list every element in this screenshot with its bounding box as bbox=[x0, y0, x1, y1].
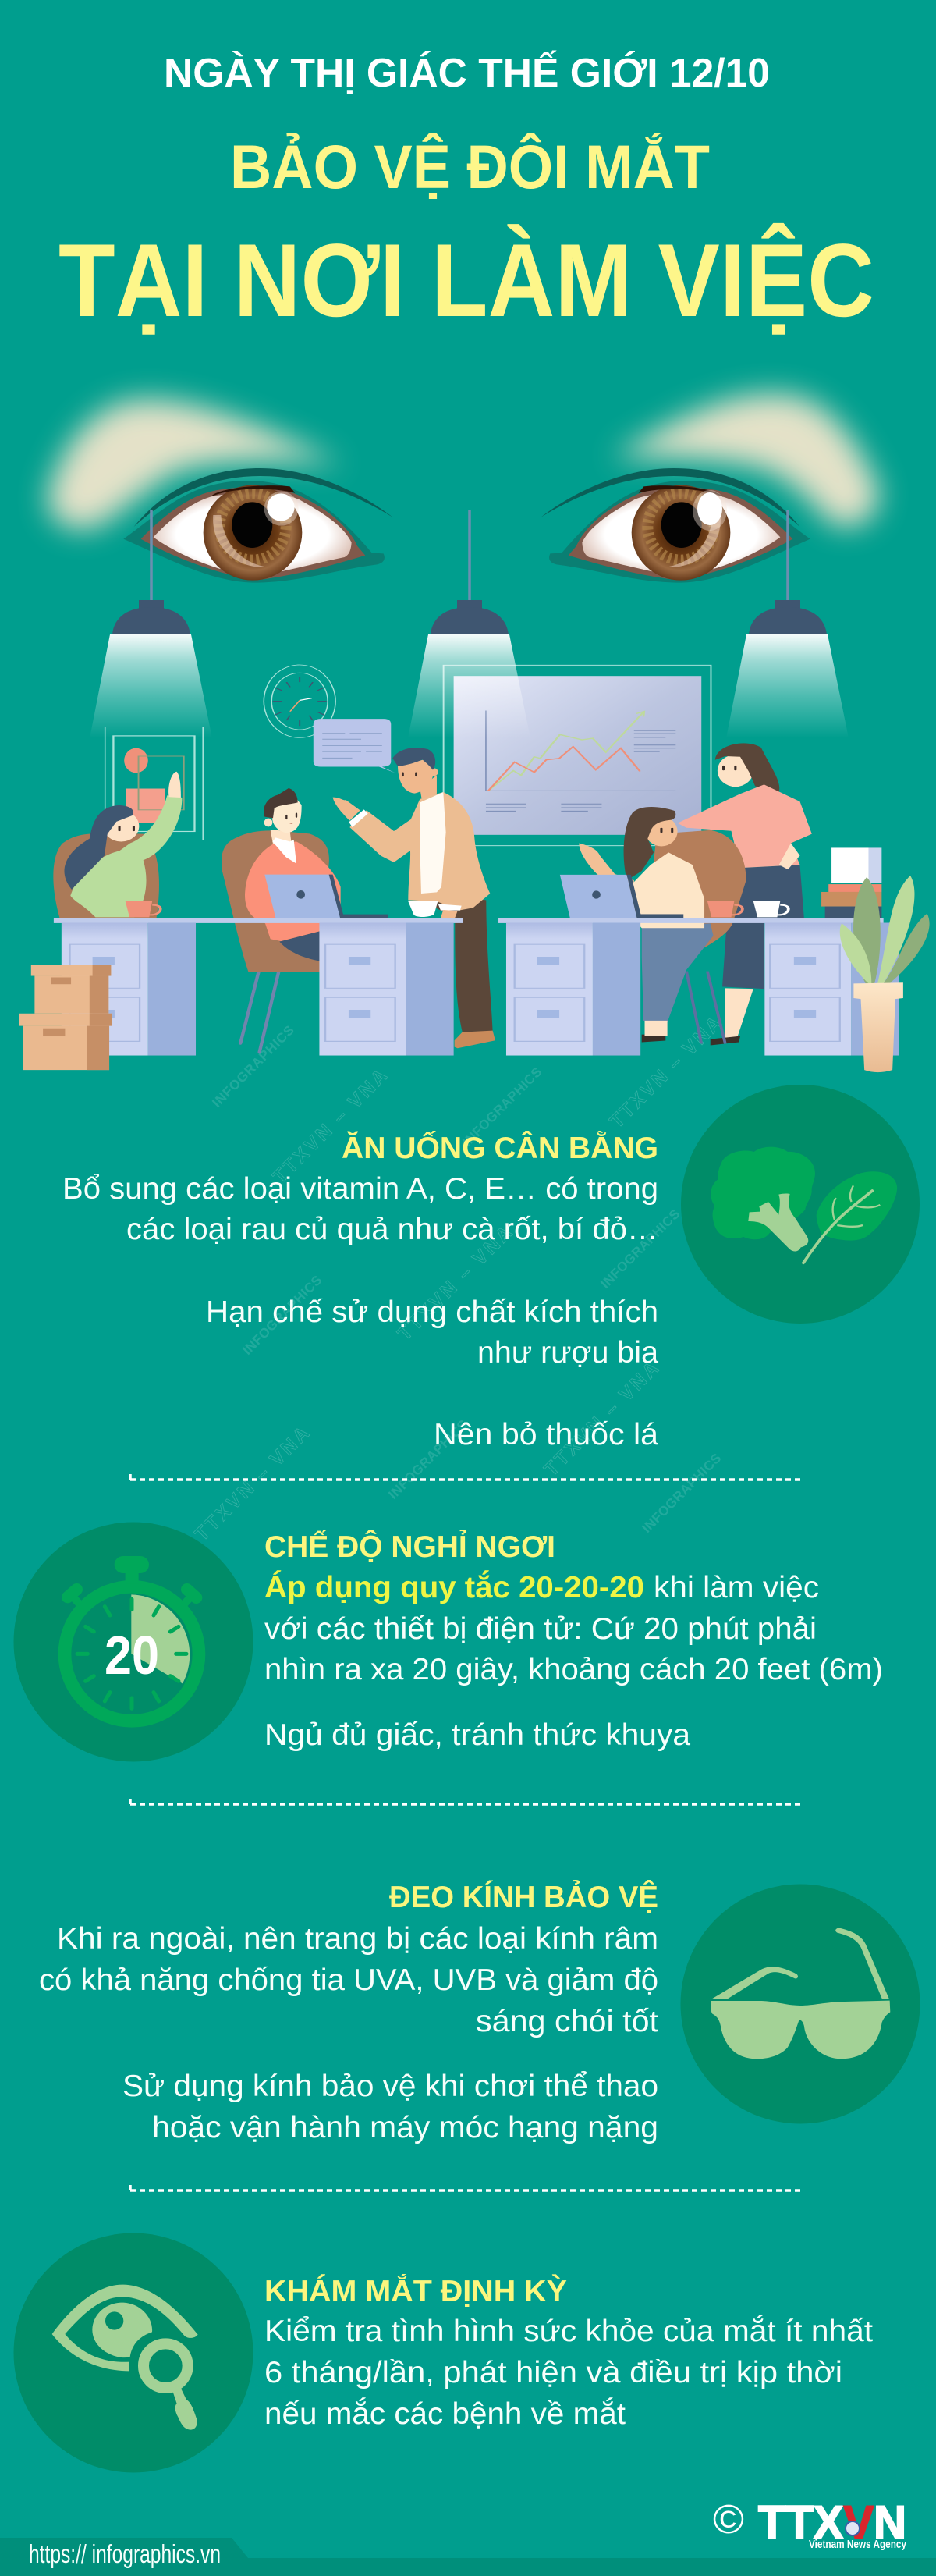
body text: sáng chói tốt bbox=[476, 2005, 658, 2038]
chart notes bbox=[486, 730, 675, 811]
body text: Bổ sung các loại vitamin A, C, E… có trong bbox=[62, 1172, 658, 1206]
body text: các loại rau củ quả như cà rốt, bí đỏ… bbox=[126, 1213, 658, 1246]
glowing eyebrows bbox=[47, 394, 880, 529]
standing woman bbox=[678, 743, 812, 1045]
right eye upper crease bbox=[541, 468, 800, 527]
green trend line bbox=[488, 712, 644, 791]
heading: KHÁM MẮT ĐỊNH KỲ bbox=[264, 2274, 567, 2308]
left eye lid bbox=[123, 481, 385, 583]
watermarks: TTXVN – VNA bbox=[393, 1222, 516, 1345]
body text: Hạn chế sử dụng chất kích thích bbox=[206, 1295, 658, 1329]
right highlight bbox=[697, 492, 722, 525]
copyright symbol: © bbox=[713, 2497, 744, 2542]
heading: ĂN UỐNG CÂN BẰNG bbox=[342, 1130, 658, 1165]
body text: nếu mắc các bệnh về mắt bbox=[264, 2397, 626, 2431]
right pupil bbox=[661, 502, 702, 548]
office wall decorations bbox=[105, 665, 711, 846]
left pupil bbox=[232, 502, 272, 548]
section: eye check bbox=[14, 2233, 873, 2472]
left eye sclera bbox=[141, 487, 365, 580]
laptop 2 bbox=[560, 875, 683, 918]
body text: Ngủ đủ giấc, tránh thức khuya bbox=[264, 1718, 690, 1752]
drawer cabinet 3 bbox=[506, 923, 640, 1056]
left woman on chair bbox=[53, 772, 182, 918]
title block bbox=[58, 50, 874, 339]
title line 2: BẢO VỆ ĐÔI MẮT bbox=[230, 132, 710, 201]
lamp 3 bbox=[726, 600, 849, 738]
agency wordmark: TTXVN bbox=[758, 2496, 906, 2549]
footer band bbox=[0, 2538, 936, 2576]
body text: Sử dụng kính bảo vệ khi chơi thể thao bbox=[122, 2070, 658, 2103]
lamps bbox=[90, 510, 849, 738]
icon: stopwatch bbox=[14, 1522, 253, 1762]
left highlight bbox=[264, 492, 299, 526]
body text: khi làm việc bbox=[654, 1571, 819, 1604]
section: protective glasses bbox=[39, 1880, 920, 2144]
desk tops bbox=[54, 918, 463, 923]
left eye bbox=[123, 468, 392, 583]
left brow glow bbox=[47, 400, 343, 529]
desks bbox=[54, 918, 899, 1056]
watermarks: INFOGRAPHICS bbox=[597, 1206, 682, 1292]
watermarks: TTXVN – VNA bbox=[268, 1065, 392, 1188]
watermarks: TTXVN – VNA bbox=[605, 1012, 726, 1132]
lamp 1 bbox=[90, 600, 212, 738]
office scene bbox=[19, 743, 930, 1072]
cups bbox=[126, 901, 789, 917]
timer number: 20 bbox=[105, 1625, 159, 1686]
heading: ĐEO KÍNH BẢO VỆ bbox=[389, 1880, 658, 1914]
wall clock bbox=[264, 665, 335, 737]
body text: có khả năng chống tia UVA, UVB và giảm độ bbox=[39, 1963, 658, 1997]
divider 2 bbox=[130, 1799, 804, 1804]
right eye lid bbox=[549, 481, 810, 583]
watermarks: INFOGRAPHICS bbox=[639, 1451, 724, 1536]
body text: Khi ra ngoài, nên trang bị các loại kính râm bbox=[57, 1922, 658, 1956]
watermarks: INFOGRAPHICS bbox=[209, 1022, 297, 1110]
watermarks: TTXVN – VNA bbox=[190, 1423, 314, 1545]
icon: broccoli and leaf bbox=[681, 1085, 920, 1324]
section: rest bbox=[14, 1522, 883, 1762]
body text: Áp dụng quy tắc 20-20-20 bbox=[264, 1570, 644, 1604]
watermarks: INFOGRAPHICS bbox=[459, 1064, 544, 1149]
body text: với các thiết bị điện tử: Cứ 20 phút phải bbox=[264, 1612, 817, 1646]
laptop 1 bbox=[264, 875, 341, 918]
left iris bbox=[204, 485, 302, 581]
body text: Nên bỏ thuốc lá bbox=[434, 1418, 658, 1451]
watermarks bbox=[190, 1012, 726, 1545]
potted plant bbox=[840, 876, 930, 1072]
body text bbox=[264, 2315, 873, 2431]
agency tagline: Vietnam News Agency bbox=[809, 2538, 907, 2551]
body text bbox=[39, 1922, 658, 2144]
drawer cabinet 1 bbox=[62, 923, 196, 1056]
watermarks: TTXVN – VNA bbox=[540, 1358, 663, 1480]
drawer cabinet 4 bbox=[764, 923, 899, 1056]
icon: eye with magnifier bbox=[14, 2233, 253, 2472]
seated man bbox=[222, 788, 388, 1052]
right eye bbox=[541, 468, 810, 583]
title line 1: NGÀY THỊ GIÁC THẾ GIỚI 12/10 bbox=[164, 50, 770, 96]
globe bbox=[846, 2521, 860, 2535]
wall picture bbox=[105, 727, 203, 840]
body text: Kiểm tra tình hình sức khỏe của mắt ít nhất bbox=[264, 2315, 873, 2348]
section: balanced diet bbox=[62, 1085, 920, 1451]
body text: 6 tháng/lần, phát hiện và điều trị kịp thời bbox=[264, 2356, 842, 2389]
body text: nhìn ra xa 20 giây, khoảng cách 20 feet (6m) bbox=[264, 1653, 883, 1686]
chart board bbox=[444, 665, 711, 846]
lamp cords bbox=[151, 510, 788, 601]
coral trend line bbox=[488, 747, 640, 791]
right eye sclera bbox=[569, 487, 792, 580]
seated man and standing man bbox=[222, 748, 495, 1052]
body text bbox=[62, 1172, 658, 1451]
speech bubble bbox=[314, 719, 395, 773]
drawer cabinet 2 bbox=[319, 923, 454, 1056]
chart axes bbox=[486, 710, 675, 791]
watermarks: INFOGRAPHICS bbox=[385, 1417, 470, 1502]
paper stack and books bbox=[821, 847, 881, 918]
divider 3 bbox=[130, 2185, 804, 2190]
seated woman right bbox=[579, 807, 746, 1044]
left eye upper crease bbox=[134, 468, 392, 527]
icon: sunglasses bbox=[680, 1884, 920, 2124]
body text bbox=[264, 1570, 883, 1752]
watermarks: INFOGRAPHICS bbox=[239, 1273, 324, 1358]
standing man bbox=[333, 748, 495, 1048]
body text: như rượu bia bbox=[477, 1336, 658, 1370]
cardboard boxes bbox=[19, 965, 112, 1070]
right iris bbox=[632, 485, 730, 581]
heading: CHẾ ĐỘ NGHỈ NGƠI bbox=[264, 1529, 555, 1564]
lamp 2 bbox=[408, 600, 530, 738]
right highlight ring bbox=[693, 490, 727, 531]
divider 1 bbox=[130, 1474, 804, 1480]
footer url: https:// infographics.vn bbox=[29, 2539, 221, 2568]
right brow glow bbox=[612, 394, 880, 527]
logo: TTXVN bbox=[713, 2496, 907, 2551]
body text: hoặc vận hành máy móc hạng nặng bbox=[152, 2111, 658, 2144]
coffee cup bbox=[408, 901, 438, 917]
